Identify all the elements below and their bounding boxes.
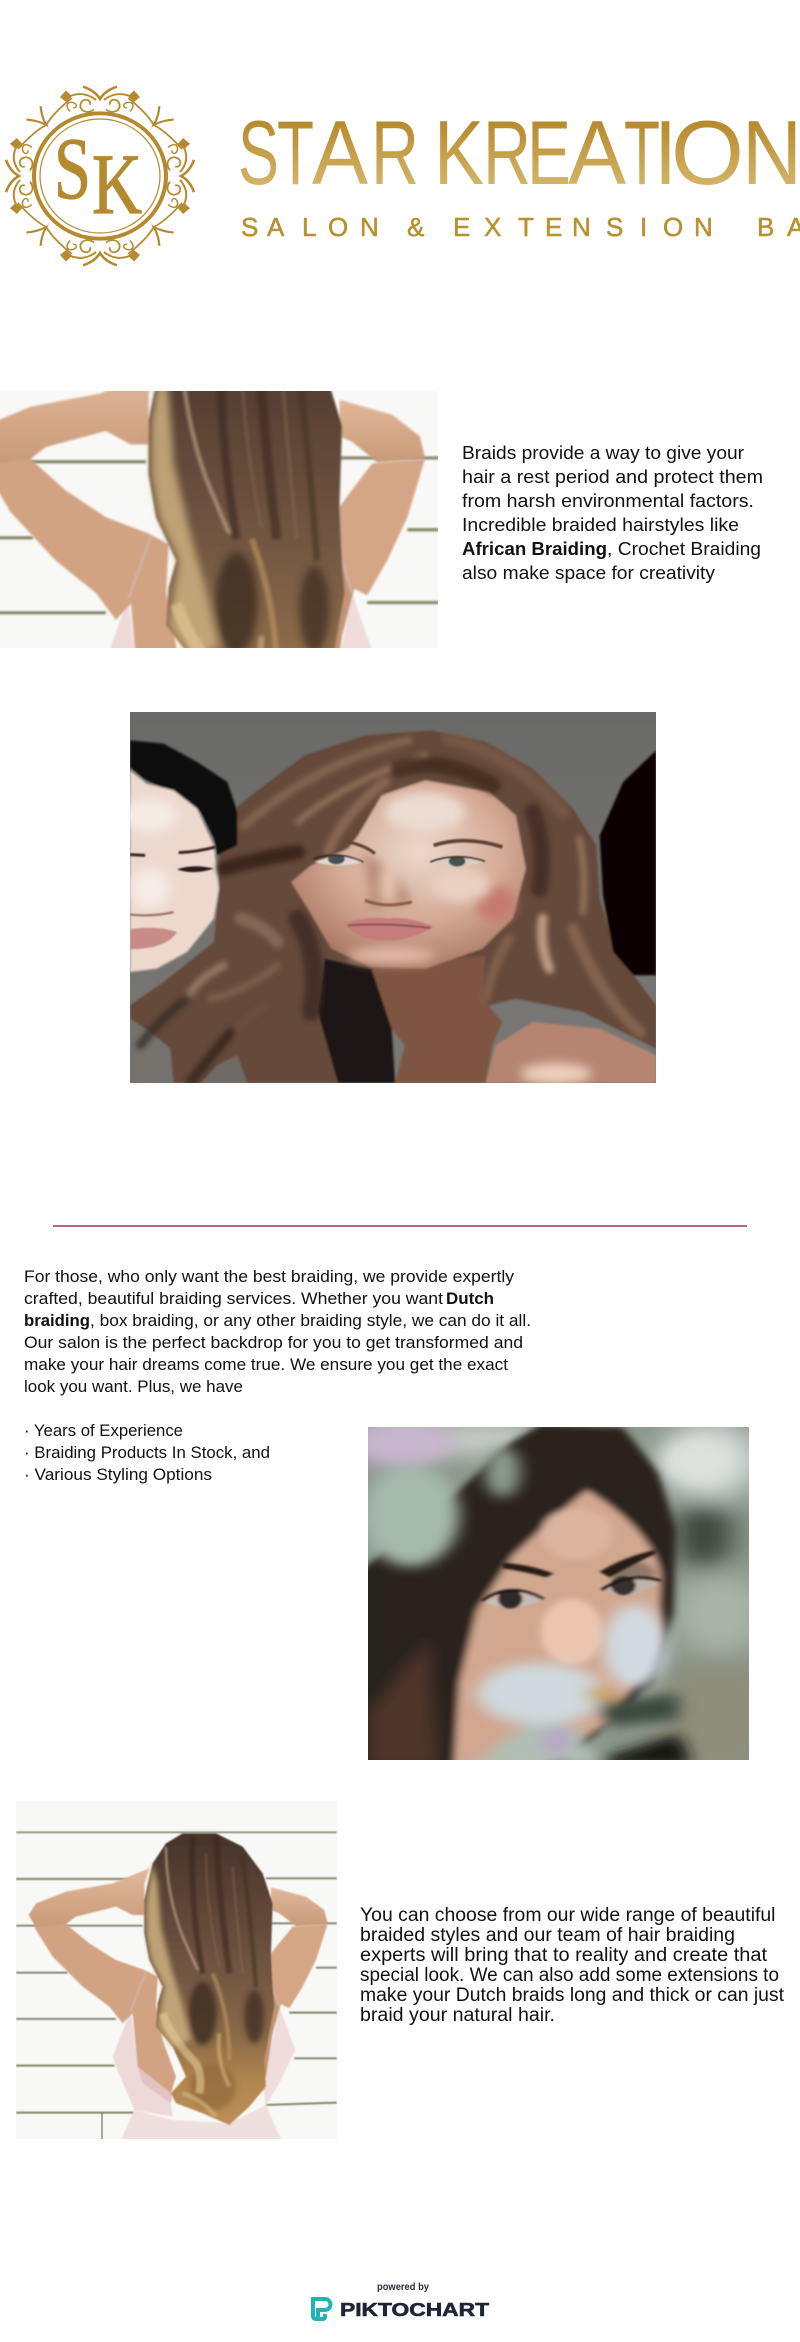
logo wordmark: T	[624, 103, 660, 204]
logo emblem	[6, 87, 194, 265]
text block: best braiding: Dutch	[446, 1290, 494, 1308]
photo: long hair from behind, full figure	[16, 1830, 337, 2139]
photo: three models portrait	[123, 709, 663, 1089]
logo wordmark	[238, 103, 800, 204]
Piktochart wordmark: PIKTOCHART	[340, 2299, 490, 2320]
text block: braids intro	[462, 443, 763, 583]
list: salon benefits: · Braiding Products In Stock, and	[24, 1444, 270, 1462]
text block: range of styles: special look. We can also add some extensions to	[360, 1965, 779, 1986]
logo wordmark: R	[483, 103, 531, 204]
text block: best braiding	[24, 1268, 531, 1396]
footer: powered by Piktochart	[313, 2282, 490, 2320]
logo wordmark: S	[238, 103, 279, 204]
list: salon benefits: · Various Styling Options	[24, 1466, 212, 1484]
text block: range of styles: braided styles and our team of hair braiding	[360, 1925, 735, 1946]
text block: best braiding: For those, who only want the best braiding, we provide expertly	[24, 1268, 515, 1286]
logo wordmark: T	[277, 103, 314, 204]
logo wordmark: K	[434, 103, 484, 204]
text block: best braiding: Our salon is the perfect backdrop for you to get transformed and	[24, 1334, 523, 1352]
logo wordmark: A	[568, 103, 626, 204]
text block: braids intro: , Crochet Braiding	[607, 539, 761, 559]
text block: best braiding: crafted, beautiful braiding services. Whether you want	[24, 1290, 443, 1308]
text block: braids intro: Braids provide a way to give your	[462, 443, 744, 463]
photo: long hair from behind, cropped	[0, 391, 438, 648]
text block: range of styles: You can choose from our wide range of beautiful	[360, 1905, 776, 1926]
logo wordmark: E	[527, 103, 571, 204]
logo wordmark: R	[371, 103, 419, 204]
text block: range of styles: experts will bring that to reality and create that	[360, 1945, 768, 1966]
logo wordmark: I	[654, 103, 677, 204]
logo tagline: SALON&EXTENSIONBA	[241, 212, 800, 242]
text block: best braiding: , box braiding, or any other braiding style, we can do it all.	[90, 1312, 531, 1330]
list: salon benefits: · Years of Experience	[24, 1422, 183, 1440]
logo emblem: S	[54, 121, 91, 218]
powered by label: powered by	[377, 2282, 429, 2293]
text block: best braiding: look you want. Plus, we have	[24, 1378, 243, 1396]
text block: best braiding: make your hair dreams come true. We ensure you get the exact	[24, 1356, 508, 1374]
text block: range of styles: braid your natural hair.	[360, 2005, 555, 2026]
logo wordmark: A	[312, 103, 368, 204]
list: salon benefits	[24, 1422, 270, 1484]
text block: braids intro: African Braiding	[462, 539, 607, 559]
icon: Piktochart mark	[313, 2299, 330, 2319]
text block: braids intro: Incredible braided hairstyles like	[462, 515, 739, 535]
logo emblem: K	[92, 136, 142, 232]
text block: range of styles: make your Dutch braids long and thick or can just	[360, 1985, 785, 2006]
photo: woman behind blossoms	[368, 1427, 749, 1760]
logo wordmark: O	[671, 103, 744, 204]
text block: braids intro: from harsh environmental factors.	[462, 491, 754, 511]
divider line	[53, 1225, 747, 1227]
text block: best braiding: braiding	[24, 1312, 90, 1330]
text block: braids intro: hair a rest period and protect them	[462, 467, 763, 487]
logo: Star Kreations	[6, 87, 800, 265]
text block: braids intro: also make space for creativity	[462, 563, 715, 583]
text block: range of styles	[360, 1905, 785, 2026]
